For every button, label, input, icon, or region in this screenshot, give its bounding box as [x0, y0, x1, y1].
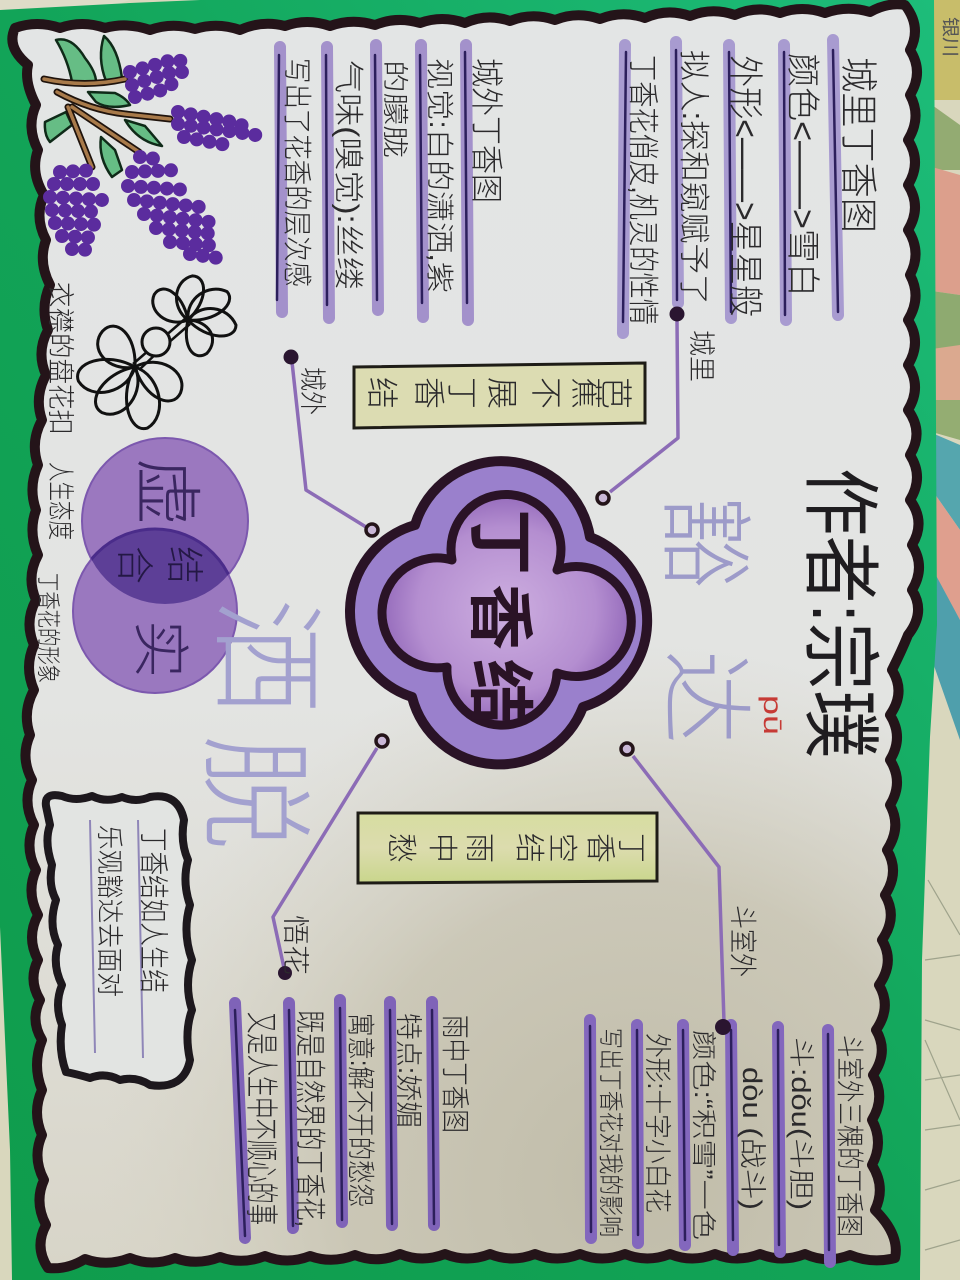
panel: 城里 notes: 拟人:探和窥赋予了	[676, 50, 711, 305]
illustration: flower knots outline	[76, 273, 239, 430]
panel: 城里 notes: 颜色<——>雪白	[783, 53, 821, 297]
illustration: lilac branch	[44, 36, 266, 258]
panel: 斗室外 notes: 颜色:“积雪”一色	[689, 1030, 717, 1240]
panel: 城里 notes: 城里丁香图	[836, 57, 878, 233]
panel: 斗室外 notes: 斗:dǒu(斗胆)	[786, 1037, 816, 1210]
heading: 豁达: 豁达	[652, 495, 757, 744]
heading: 洒脱: 洒脱	[189, 598, 329, 850]
heading: author: 作者:宗璞	[796, 468, 884, 758]
heading: author	[758, 468, 884, 758]
panel: 雨中 notes: 特点:娇媚	[393, 1013, 423, 1128]
panel: 斗室外 notes: 外形:十字小白花	[642, 1033, 672, 1213]
text: left side labels: 衣襟的盘花扣	[45, 282, 75, 435]
panel: 城里 notes	[623, 40, 878, 333]
callout: summary box: 乐观豁达去面对	[94, 825, 124, 997]
panel: 斗室外 notes	[590, 1020, 865, 1262]
panel: 城里 notes: 丁香花俏皮,机灵的性情	[625, 55, 660, 325]
connector: 悟花	[273, 748, 377, 980]
connector: 城里: 城里	[686, 330, 716, 382]
text: left side labels: 人生态度	[45, 462, 75, 540]
panel: 城外 notes: 城外丁香图	[468, 58, 505, 203]
callout: summary box	[46, 795, 192, 1086]
diagram: venn circles 虚 结合 实	[73, 438, 248, 693]
quote box: 丁香空结雨中愁	[358, 813, 657, 883]
panel: 城里 notes: 外形<——>星星般	[725, 55, 764, 317]
panel: 斗室外 notes: 斗室外三棵的丁香图	[834, 1035, 865, 1237]
connector: 悟花: 悟花	[280, 915, 310, 975]
panel: 雨中 notes: 寓意:解不开的愁怨	[345, 1013, 376, 1207]
panel: 城外 notes: 的朦胧	[380, 60, 410, 158]
connector: 城外	[284, 350, 366, 527]
pinyin annotation: pū	[758, 695, 788, 735]
quote box: 丁香空结雨中愁: 丁香空结雨中愁	[384, 833, 647, 863]
quote box: 芭蕉不展丁香结	[354, 363, 645, 428]
connector: 城外: 城外	[297, 367, 327, 415]
diagram: venn circles 虚 结合 实: 实	[127, 620, 192, 678]
icon: lilac flower clusters	[50, 60, 266, 258]
panel: 城外 notes	[277, 45, 505, 320]
text: left side labels: 丁香花的形象	[34, 573, 61, 683]
panel: 城外 notes: 视觉:白的潇洒,紫	[424, 58, 455, 293]
text: left side labels	[34, 282, 75, 683]
icon: branches	[44, 79, 170, 167]
connector: 城里	[610, 306, 716, 492]
central quatrefoil with title 丁香结: 丁香结	[463, 509, 537, 725]
quote box: 芭蕉不展丁香结: 芭蕉不展丁香结	[364, 377, 634, 409]
panel: 城外 notes: 气味(嗅觉):丝缕	[331, 60, 364, 290]
diagram: venn circles 虚 结合 实: 结合	[112, 546, 204, 584]
panel: 雨中 notes	[235, 1000, 471, 1238]
map label: 银川	[940, 17, 960, 57]
icon: leaves	[45, 36, 162, 177]
callout: summary box: 丁香结如人生结	[136, 828, 169, 993]
diagram: venn circles 虚 结合 实: 虚	[128, 458, 204, 526]
connector rings	[366, 492, 633, 755]
connector: 斗室外	[633, 756, 758, 1035]
panel: 雨中 notes: 雨中丁香图	[438, 1015, 471, 1133]
panel: 斗室外 notes: 写出丁香花对我的影响	[596, 1028, 624, 1237]
connector: 斗室外: 斗室外	[727, 905, 758, 977]
panel: 城外 notes: 写出了花香的层次感	[280, 58, 313, 287]
central quatrefoil with title 丁香结	[350, 461, 647, 764]
panel: 斗室外 notes: dòu (战斗)	[737, 1067, 767, 1210]
